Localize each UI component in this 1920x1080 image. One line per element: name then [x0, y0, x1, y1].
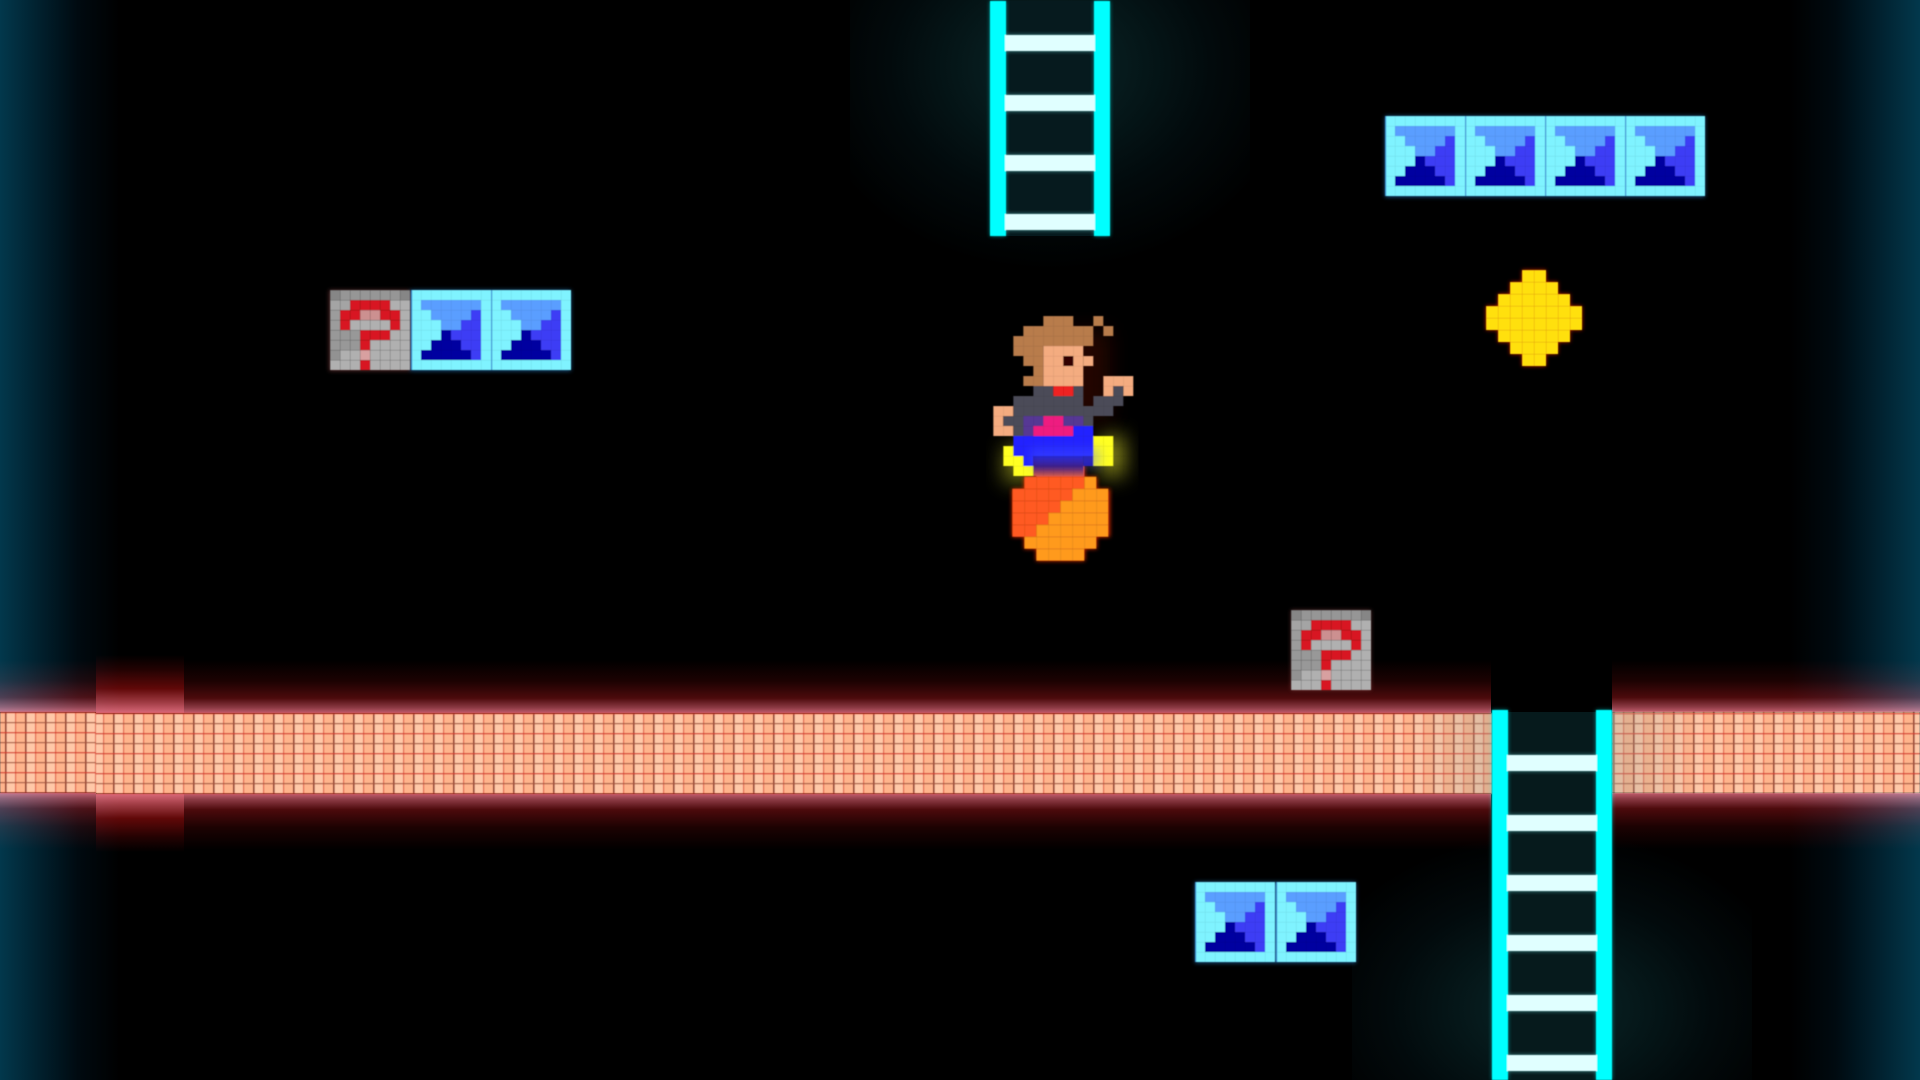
block row: below the floor	[1195, 882, 1356, 963]
yellow shoes	[1003, 436, 1113, 476]
ball	[1012, 465, 1108, 561]
blue trousers	[1013, 426, 1093, 466]
coin	[1486, 270, 1582, 366]
pink belt	[1033, 416, 1073, 436]
yellow and red under-glow	[1004, 330, 1124, 561]
floor platform	[0, 712, 1920, 794]
mystery block above the floor	[1291, 610, 1371, 690]
left side neon glow	[0, 0, 120, 1080]
figure	[993, 316, 1133, 476]
lower ladder ambient glow	[1352, 796, 1752, 1080]
shirt	[1003, 386, 1123, 436]
eye	[1063, 356, 1073, 366]
upper ladder ambient glow	[850, 0, 1250, 330]
block row: top right	[1385, 116, 1705, 197]
lower ladder	[1492, 710, 1612, 1080]
hair	[1013, 316, 1113, 386]
shaft behind the lower ladder	[1507, 712, 1597, 1080]
purple tint	[1023, 416, 1083, 436]
character on rolling ball	[993, 316, 1133, 561]
floor red glow	[0, 655, 1920, 852]
right side neon glow	[1790, 0, 1920, 1080]
blue light highlight	[1030, 448, 1100, 468]
block row: mystery and two blue blocks	[329, 290, 571, 371]
skin	[993, 346, 1133, 436]
scarf	[1053, 386, 1073, 396]
upper ladder	[990, 1, 1110, 236]
